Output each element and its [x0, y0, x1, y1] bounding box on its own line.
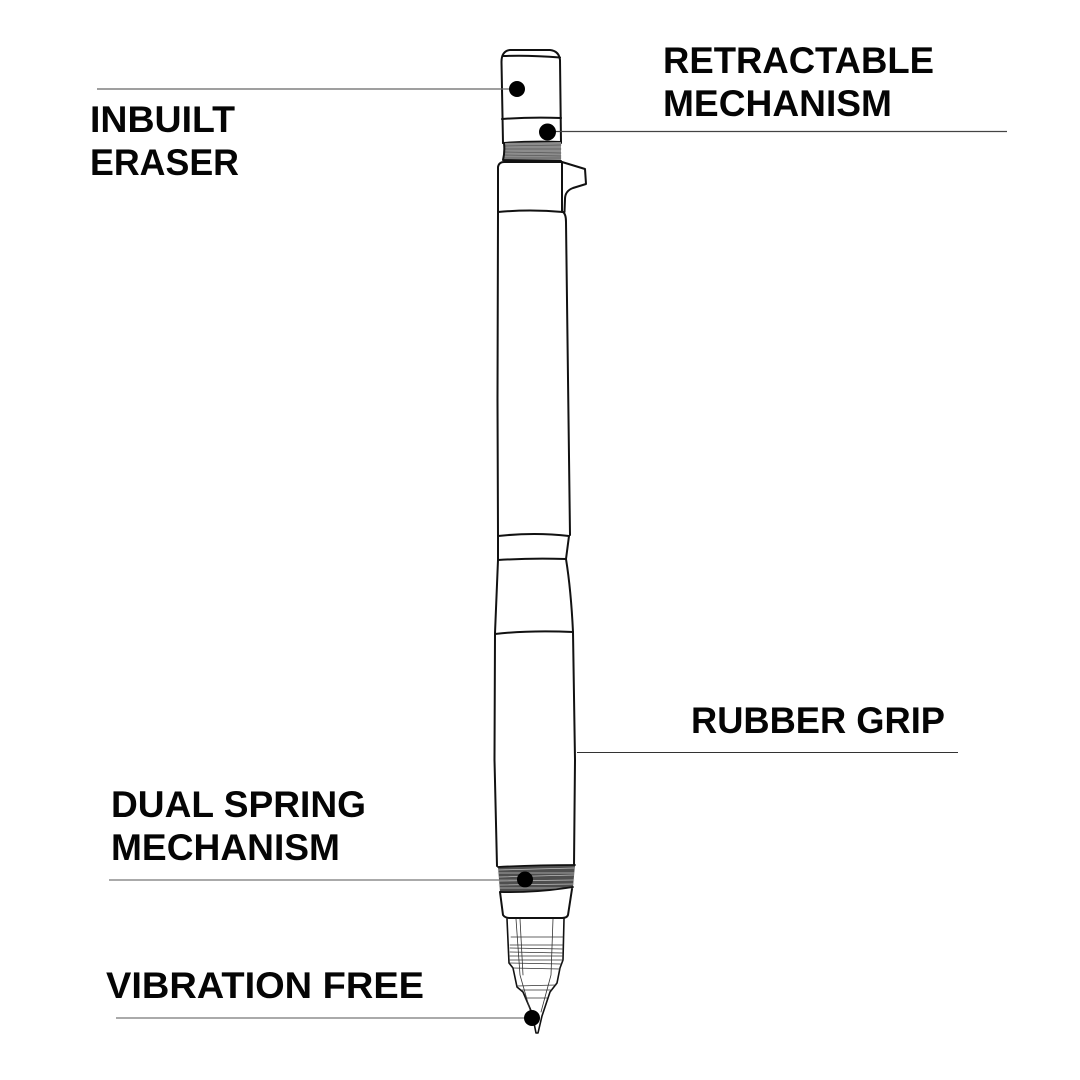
label: inbuilt eraser: INBUILT [90, 99, 235, 140]
upper knurled band [503, 142, 561, 161]
centre band [498, 534, 569, 560]
pencil illustration [494, 50, 586, 1033]
lower collar [500, 889, 572, 918]
tapered section [495, 559, 573, 634]
callout: retractable mechanism [539, 40, 1007, 140]
callout: inbuilt eraser [90, 81, 525, 183]
metal cone tip [507, 919, 564, 1033]
callout: dual spring mechanism [109, 784, 533, 888]
label: vibration free: VIBRATION FREE [106, 965, 424, 1006]
label: inbuilt eraser: ERASER [90, 142, 239, 183]
label: dual spring mechanism: MECHANISM [111, 827, 340, 868]
label: dual spring mechanism: DUAL SPRING [111, 784, 366, 825]
eraser cap [502, 50, 561, 143]
lower knurled band [498, 865, 575, 892]
upper barrel [498, 210, 570, 536]
label: retractable mechanism: MECHANISM [663, 83, 892, 124]
label: retractable mechanism: RETRACTABLE [663, 40, 934, 81]
rubber grip barrel [494, 632, 575, 866]
label: rubber grip: RUBBER GRIP [691, 700, 945, 741]
callout: vibration free [106, 965, 540, 1026]
collar and clip [498, 162, 586, 212]
